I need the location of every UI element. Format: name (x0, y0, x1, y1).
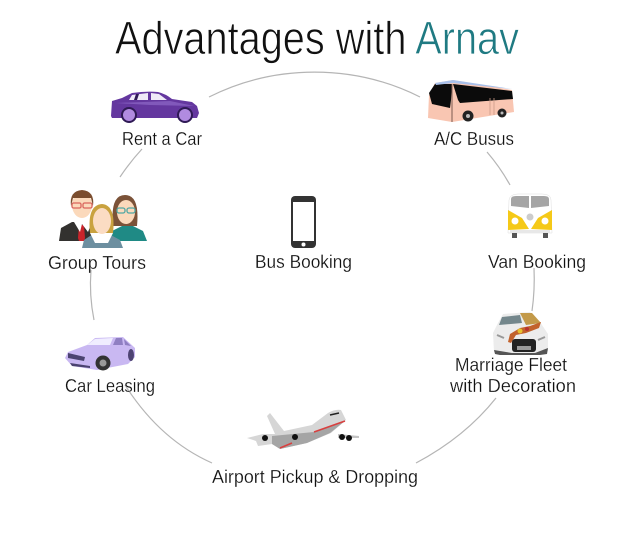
item: Marriage Fleet with Decoration (449, 312, 576, 396)
icon: purple car (111, 92, 199, 123)
label: Airport Pickup & Dropping: Airport Pickup & Dropping (212, 467, 418, 487)
item: A/C Busus (428, 80, 514, 149)
label: Group Tours: Group Tours (48, 253, 146, 273)
label: Car Leasing: Car Leasing (65, 376, 155, 396)
item: Car Leasing (65, 337, 155, 396)
item: Van Booking (488, 194, 586, 272)
label: Marriage Fleet: Marriage Fleet (455, 355, 567, 375)
item: Airport Pickup & Dropping (212, 410, 418, 487)
label: Van Booking: Van Booking (488, 252, 586, 272)
item: Group Tours (48, 190, 147, 273)
icon: smartphone (291, 196, 316, 248)
label: Rent a Car: Rent a Car (122, 129, 202, 149)
label: Bus Booking: Bus Booking (255, 252, 352, 272)
item: Bus Booking (255, 196, 352, 272)
label: A/C Busus: A/C Busus (434, 129, 514, 149)
icon: group of people (59, 190, 147, 248)
icon: yellow van (508, 194, 552, 238)
icon: bus (428, 80, 514, 122)
icon: airplane (247, 410, 359, 449)
icon: decorated white car (493, 312, 548, 355)
item: Rent a Car (111, 92, 202, 149)
circular connector ring (90, 72, 534, 463)
icon: lilac car (65, 337, 135, 370)
title: Advantages with Arnav (115, 12, 519, 64)
label: with Decoration: with Decoration (449, 376, 576, 396)
